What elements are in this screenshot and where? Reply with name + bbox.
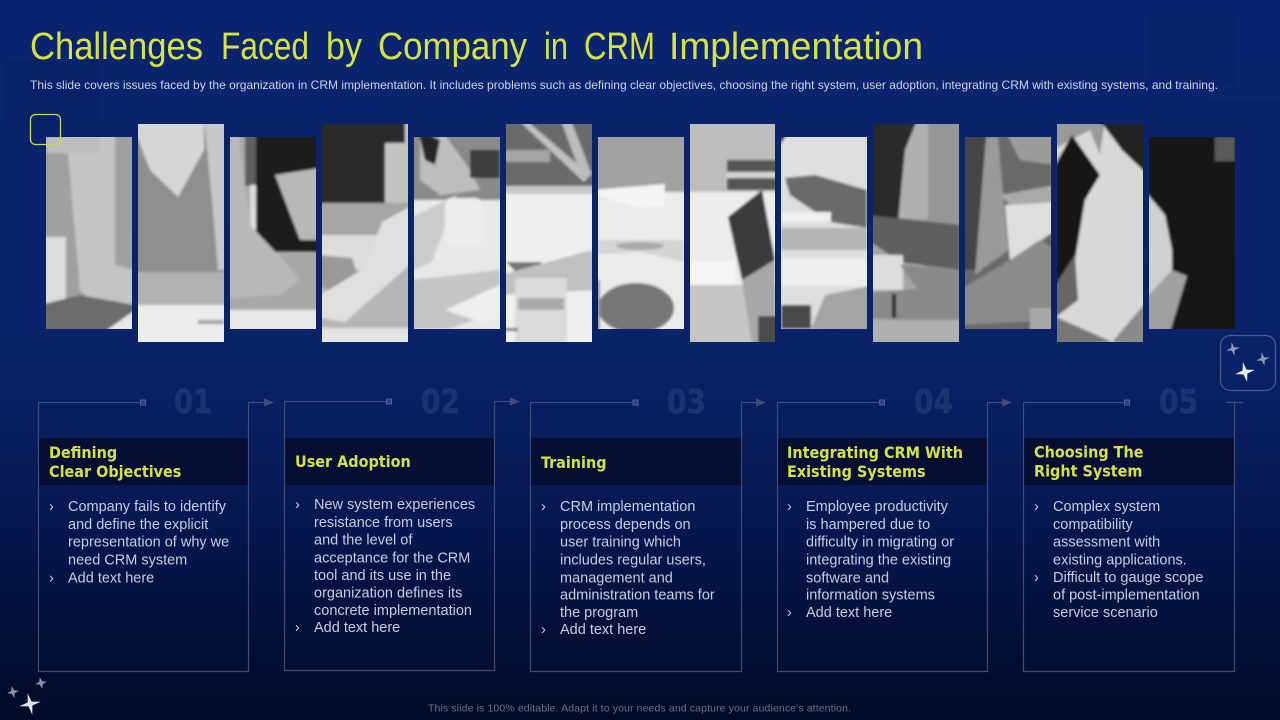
step 3 panel	[530, 382, 766, 672]
body 1: need CRM system	[68, 552, 187, 568]
body 2: organization defines its	[314, 585, 462, 601]
body 2: and the level of	[314, 532, 413, 548]
body 3: process depends on	[560, 517, 691, 533]
body 1: representation of why we	[68, 534, 229, 550]
footer note: This slide is 100% editable. Adapt it to your needs and capture your audience's attention.	[428, 702, 851, 714]
frame and arrow 2	[284, 398, 520, 670]
photo strip 11	[965, 137, 1051, 329]
step 4 panel	[777, 382, 1012, 672]
heading 2: User Adoption	[295, 452, 411, 471]
header band 3	[530, 438, 741, 485]
body 3: management and	[560, 570, 673, 586]
title: Implementation	[669, 26, 923, 68]
body 4	[787, 499, 954, 621]
body 1: ›	[49, 499, 54, 515]
heading 1: Clear Objectives	[49, 462, 181, 481]
title: by	[326, 26, 362, 68]
body 3: Add text here	[560, 622, 646, 638]
frame 5	[1024, 400, 1243, 672]
subtitle description: This slide covers issues faced by the organization in CRM implementation. It includes problems such as defining clear objectives, choosing the right system, user adoption, integrating CRM with existing systems, and training.	[30, 78, 1218, 92]
body 2	[295, 497, 475, 636]
body 5: existing applications.	[1053, 552, 1187, 568]
selection frame icon	[30, 114, 60, 144]
body 5	[1034, 499, 1203, 621]
body 4: ›	[787, 499, 792, 515]
body 3: includes regular users,	[560, 552, 706, 568]
heading 4: Integrating CRM With	[787, 443, 963, 462]
heading 5: Right System	[1034, 462, 1142, 481]
title: Company	[378, 26, 527, 68]
title: in	[544, 26, 568, 68]
body 3: CRM implementation	[560, 499, 695, 515]
body 2: New system experiences	[314, 497, 475, 513]
body 4: difficulty in migrating or	[806, 534, 954, 550]
title: CRM	[584, 26, 655, 68]
photo strip 3	[230, 137, 316, 329]
body 5: service scenario	[1053, 605, 1158, 621]
body 4: Employee productivity	[806, 499, 949, 515]
body 4: information systems	[806, 588, 935, 604]
body 2: ›	[295, 620, 300, 636]
photo strip 4	[322, 124, 408, 342]
photo strip 13	[1149, 137, 1235, 329]
body 5: ›	[1034, 570, 1039, 586]
body 5: compatibility	[1053, 517, 1134, 533]
photo strip 6	[506, 124, 592, 342]
photo strip 7	[598, 137, 684, 329]
photo strip 8	[690, 124, 775, 342]
heading 5: Choosing The	[1034, 442, 1144, 462]
body 4: ›	[787, 605, 792, 621]
body 3: administration teams for	[560, 588, 715, 604]
title: Faced	[221, 26, 309, 68]
body 3: ›	[541, 499, 546, 515]
body 2: concrete implementation	[314, 603, 472, 619]
header band 5	[1023, 438, 1235, 485]
body 4: software and	[806, 570, 889, 586]
title: Challenges	[30, 26, 203, 68]
body 1: Add text here	[68, 570, 154, 586]
number 02: 02	[421, 382, 460, 421]
body 3: the program	[560, 605, 638, 621]
number 05: 05	[1159, 382, 1198, 421]
body 1: and define the explicit	[68, 517, 208, 533]
photo strip 1	[46, 137, 132, 329]
body 5: Complex system	[1053, 499, 1160, 515]
step 2 panel	[284, 382, 520, 670]
body 1: ›	[49, 570, 54, 586]
body 4: Add text here	[806, 605, 892, 621]
body 5: assessment with	[1053, 534, 1160, 550]
body 2: ›	[295, 497, 300, 513]
photo strip 10	[873, 124, 959, 342]
photo strip 12	[1057, 124, 1143, 342]
heading 4: Existing Systems	[787, 462, 926, 481]
number 03: 03	[667, 382, 706, 421]
icon: stars bottom left	[6, 676, 48, 717]
photo strip 2	[138, 124, 224, 342]
header band 2	[284, 438, 495, 485]
body 2: tool and its use in the	[314, 568, 451, 584]
body 1	[49, 499, 229, 586]
photo strip 5	[414, 137, 500, 329]
frame and arrow 3	[530, 398, 766, 672]
frame and arrow 1	[38, 398, 274, 672]
body 2: Add text here	[314, 620, 400, 636]
body 5: ›	[1034, 499, 1039, 515]
number 01: 01	[174, 382, 212, 421]
number 04: 04	[914, 382, 953, 421]
body 1: Company fails to identify	[68, 499, 227, 515]
body 2: resistance from users	[314, 515, 453, 531]
body 3: ›	[541, 622, 546, 638]
step 5 panel	[1023, 382, 1243, 672]
body 5: Difficult to gauge scope	[1053, 570, 1203, 586]
body 5: of post-implementation	[1053, 588, 1200, 604]
body 4: integrating the existing	[806, 552, 951, 568]
step 1 panel	[38, 382, 274, 672]
header band 1	[38, 438, 249, 485]
frame and arrow 4	[778, 398, 1012, 672]
header band 4	[777, 438, 988, 485]
photo strips: team working at a table	[40, 118, 1240, 350]
body 3	[541, 499, 715, 638]
heading 3: Training	[541, 453, 607, 472]
icon: stars in rounded box	[1220, 336, 1276, 390]
heading 1: Defining	[49, 443, 117, 462]
body 4: is hampered due to	[806, 517, 930, 533]
photo strip 9	[781, 137, 867, 329]
body 3: user training which	[560, 534, 681, 550]
body 2: acceptance for the CRM	[314, 550, 470, 566]
